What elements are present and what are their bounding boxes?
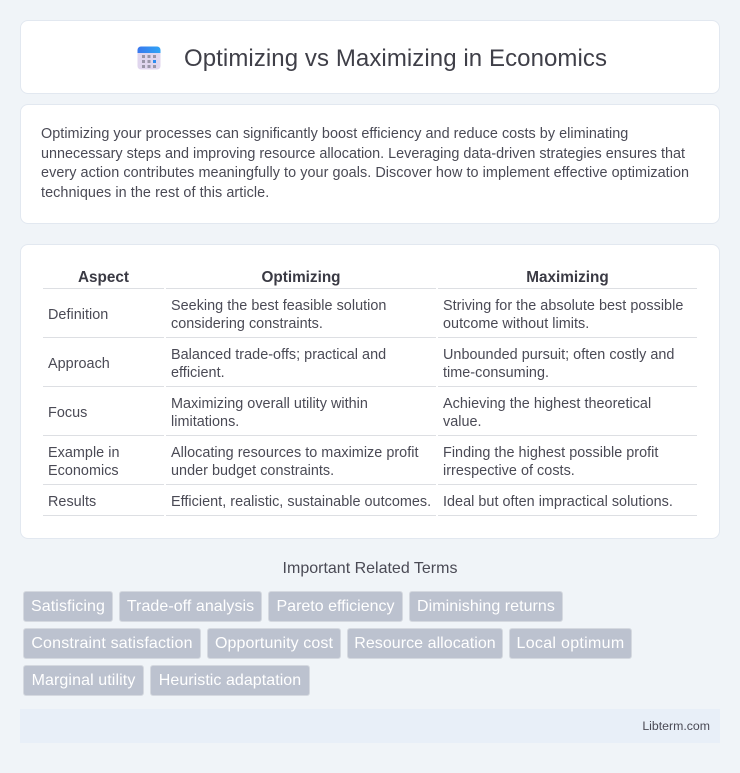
row: approach: Approach: [48, 356, 110, 372]
title: Optimizing vs Maximizing in Economics: [184, 45, 607, 72]
footer bar: [20, 709, 720, 743]
intro text: Optimizing your processes can significantly boost efficiency and reduce costs by eliminating: [41, 126, 628, 142]
row: approach: [48, 347, 674, 381]
row: definition: Seeking the best feasible solution: [171, 298, 386, 314]
table header: Optimizing: [261, 269, 341, 286]
related terms tags: Satisficing: [31, 598, 105, 615]
related terms tags: Constraint satisfaction: [31, 635, 193, 652]
row: focus: limitations.: [171, 414, 239, 430]
related terms tags: Pareto efficiency: [276, 598, 394, 615]
row: definition: Striving for the absolute best possible: [443, 298, 683, 314]
footer credit: Libterm.com: [642, 719, 710, 733]
related terms tags: Marginal utility: [32, 672, 135, 689]
related terms tags: Opportunity cost: [215, 635, 333, 652]
row: approach: efficient.: [171, 365, 225, 381]
row: example in economics: Economics: [48, 463, 119, 479]
row: focus: Focus: [48, 405, 87, 421]
row: results: Results: [48, 494, 96, 510]
row: results: Efficient, realistic, sustainable outcomes.: [171, 494, 431, 510]
row: results: [48, 494, 673, 510]
row: focus: Maximizing overall utility within: [171, 396, 368, 412]
row: focus: [48, 396, 651, 430]
row: example in economics: Allocating resources to maximize profit: [171, 445, 419, 461]
row: focus: value.: [443, 414, 482, 430]
row: definition: considering constraints.: [171, 316, 323, 332]
related terms tags: Local optimum: [517, 635, 624, 652]
row: focus: Achieving the highest theoretical: [443, 396, 651, 412]
intro text: unnecessary steps and improving resource allocation. Leveraging data-driven strategies ensures that: [41, 146, 685, 162]
row: example in economics: [48, 445, 658, 479]
row: results: Ideal but often impractical solutions.: [443, 494, 673, 510]
table header: Aspect: [78, 269, 129, 286]
related terms tags: Resource allocation: [354, 635, 496, 652]
header panel: [20, 20, 720, 94]
row: definition: outcome without limits.: [443, 316, 589, 332]
row: approach: time-consuming.: [443, 365, 549, 381]
row: example in economics: Finding the highest possible profit: [443, 445, 658, 461]
table header: Maximizing: [526, 269, 609, 286]
related terms heading: Important Related Terms: [283, 560, 457, 577]
intro text: techniques in the rest of this article.: [41, 185, 269, 201]
table header: [78, 269, 609, 286]
intro text: every action contributes meaningfully to your goals. Discover how to implement effective optimization: [41, 165, 689, 181]
row: definition: [48, 298, 683, 332]
row: approach: Unbounded pursuit; often costly and: [443, 347, 674, 363]
row: example in economics: irrespective of costs.: [443, 463, 575, 479]
icon: calendar: [138, 46, 160, 70]
row: definition: Definition: [48, 307, 108, 323]
related terms tags: Trade-off analysis: [127, 598, 254, 615]
comparison table panel: [20, 244, 720, 539]
row: example in economics: Example in: [48, 445, 120, 461]
intro panel: [20, 104, 720, 224]
row: example in economics: under budget constraints.: [171, 463, 334, 479]
related terms tags: [23, 591, 632, 696]
intro text: [41, 126, 689, 201]
row: approach: Balanced trade-offs; practical and: [171, 347, 386, 363]
related terms tags: Heuristic adaptation: [159, 672, 301, 689]
related terms tags: Diminishing returns: [417, 598, 555, 615]
